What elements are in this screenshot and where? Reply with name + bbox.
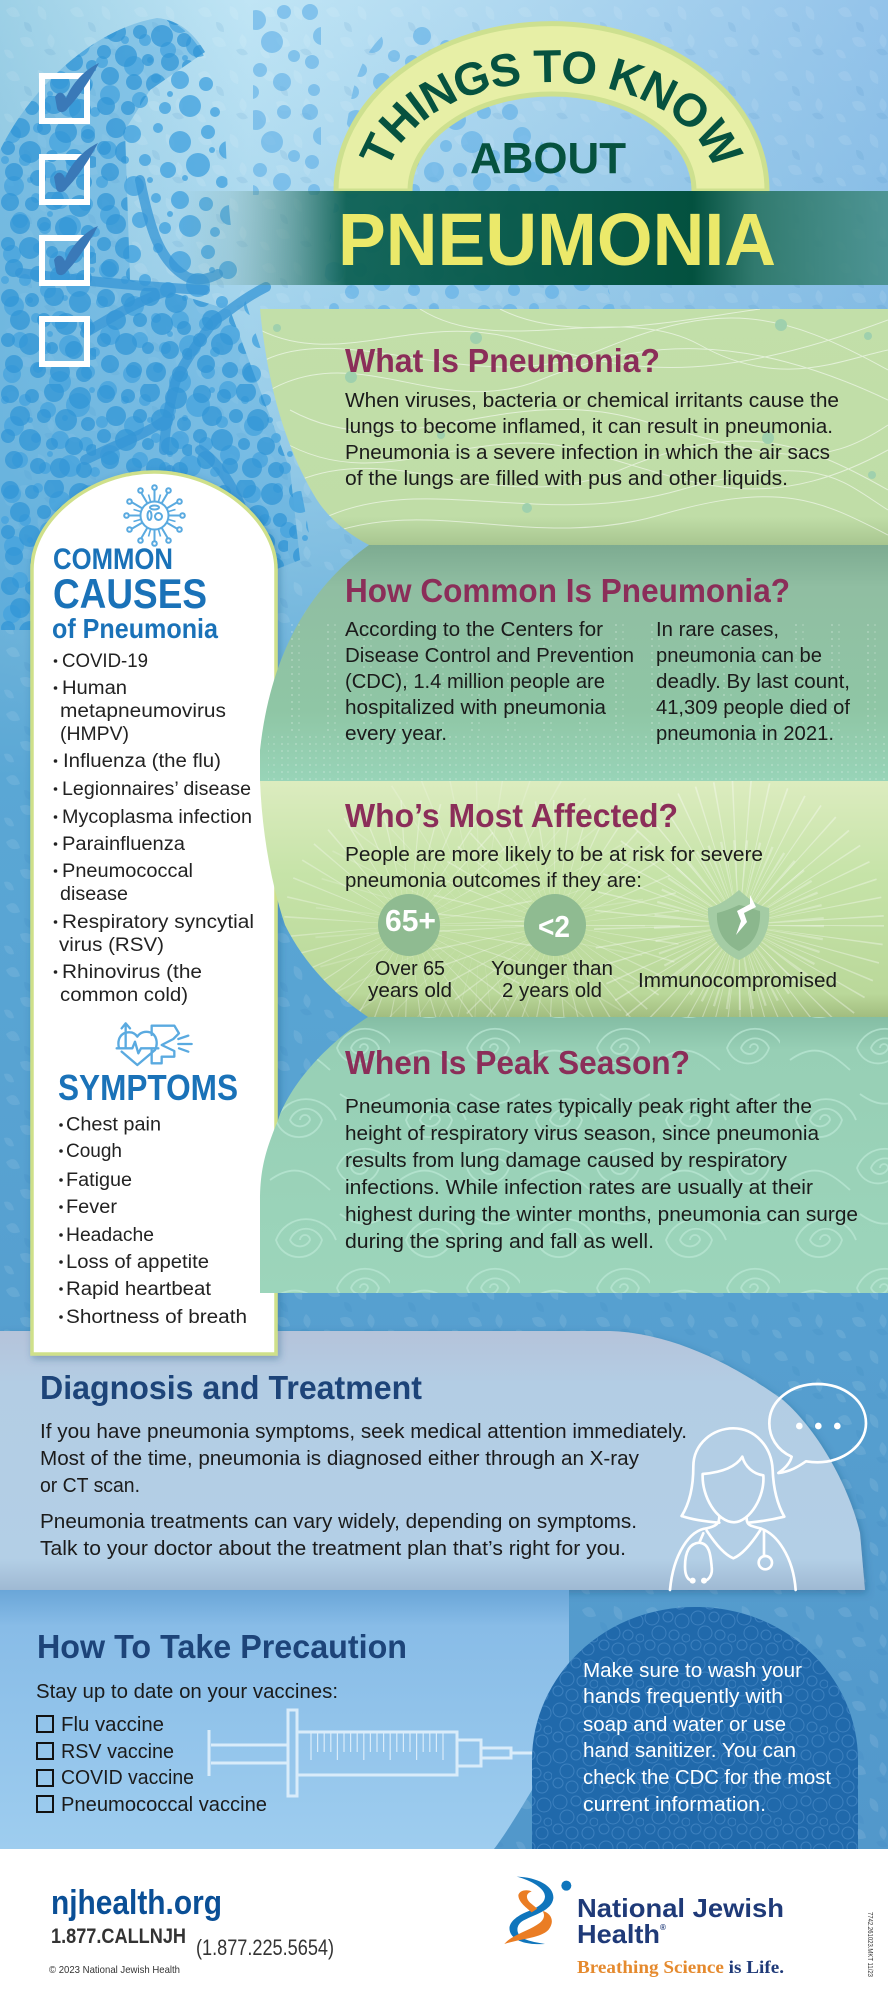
panel: how common is pneumonia [260,545,888,781]
text block: how common, left column: every year. [345,723,447,745]
panel: common causes and symptoms [32,472,276,1354]
text block: who's most affected: People are more likely to be at risk for severe [345,844,763,866]
title curved text: THINGS TO KNOW [358,50,744,163]
text block: when is peak season: infections. While infection rates are usually at their [345,1177,813,1199]
checkbox 3 with tick [42,226,98,283]
list: causes: COVID-19 [62,651,148,672]
list: symptoms: Cough [66,1141,122,1162]
list: symptoms: Chest pain [66,1114,161,1136]
heading: what is pneumonia: What Is Pneumonia? [345,342,660,379]
logo tagline: Breathing Science is Life. [577,1957,784,1977]
title: about: ABOUT [470,134,626,183]
list: symptoms: Shortness of breath [66,1307,247,1328]
checklist: vaccines: COVID vaccine [61,1767,194,1789]
heading: symptoms: SYMPTOMS [58,1067,238,1108]
stat: younger than 2 [491,894,613,1002]
list: causes: virus (RSV) [59,935,164,956]
text block: when is peak season: Pneumonia case rates typically peak right after the [345,1096,812,1118]
icon: doctor with speech bubble [670,1384,866,1590]
checklist: vaccines [37,1714,267,1816]
heading: diagnosis and treatment: Diagnosis and Treatment [40,1369,422,1406]
text block: diagnosis: Most of the time, pneumonia is diagnosed either through an X-ray [40,1448,639,1470]
stat: younger than 2: <2 [538,909,570,944]
footer: phone: 1.877.CALLNJH [51,1925,186,1948]
list: causes: Rhinovirus (the [62,962,202,983]
text block: what is pneumonia [345,390,839,490]
text: vaccine intro: Stay up to date on your vaccines: [36,1681,338,1703]
list: causes: Legionnaires’ disease [62,779,251,800]
decorative light bursts [334,825,824,1025]
logo wordmark: ® [660,1923,666,1932]
icon: virus [124,485,185,546]
text block: how common, right column: In rare cases, [656,619,779,641]
logo wordmark: National Jewish [577,1893,784,1923]
checklist: vaccines: RSV vaccine [61,1741,174,1763]
stat: younger than 2: Younger than [491,958,613,980]
checklist: vaccines: Flu vaccine [61,1714,164,1736]
panel: who's most affected [260,781,888,1025]
footer: phone: (1.877.225.5654) [196,1935,334,1960]
footer [0,1849,888,2015]
list: causes: common cold) [60,985,188,1006]
list: causes: Mycoplasma infection [62,807,252,828]
stat: over 65: 65+ [385,903,436,938]
text block: how common, right column: deadly. By last count, [656,671,850,693]
panel: diagnosis and treatment [0,1331,866,1590]
icon: syringe [209,1710,533,1796]
stat: immunocompromised shield: Immunocompromised [638,970,837,992]
icon: symptoms heart and lungs [117,1023,192,1065]
text block: how common, left column: (CDC), 1.4 million people are [345,671,605,693]
list: symptoms: Rapid heartbeat [66,1279,212,1300]
text block: hand washing: current information. [583,1794,766,1816]
panel: how to take precaution [0,1590,569,1849]
text block: how common, right column: 41,309 people died of [656,697,850,719]
text block: how common, right column: pneumonia can be [656,645,822,667]
text block: when is peak season: highest during the winter months, pneumonia can surge [345,1204,858,1226]
text block: when is peak season [345,1096,858,1253]
heading: how to take precaution: How To Take Precaution [37,1628,407,1665]
list: symptoms: Headache [66,1225,154,1246]
heading: common causes of pneumonia: COMMON [53,543,173,576]
logo: national jewish health [504,1877,784,1977]
list: causes: disease [60,884,128,905]
list: causes: Human [62,678,127,699]
list: causes: Pneumococcal [62,861,193,882]
text block: how common, right column [656,619,850,745]
checkbox 2 with tick [42,143,98,202]
text block: hand washing: soap and water or use [583,1714,786,1736]
title arch [336,24,767,191]
text block: how common, left column: According to the Centers for [345,619,603,641]
list: symptoms: Loss of appetite [66,1252,209,1273]
stat: younger than 2: 2 years old [502,980,602,1002]
list: causes: Parainfluenza [62,834,185,855]
heading: common causes of pneumonia [52,543,218,644]
illustration: trachea dots [253,0,321,195]
stat: over 65: Over 65 [375,958,445,980]
text block: when is peak season: during the spring and fall as well. [345,1231,654,1253]
text block: how common, left column: hospitalized with pneumonia [345,697,607,719]
title: pneumonia: PNEUMONIA [338,198,776,281]
logo mark: helix [504,1877,571,1944]
heading: how common: How Common Is Pneumonia? [345,572,790,609]
text block: what is pneumonia: lungs to become inflamed, it can result in pneumonia. [345,416,833,438]
panel: when is peak season [260,1017,888,1293]
checklist: vaccines: Pneumococcal vaccine [61,1794,267,1816]
list: causes: Respiratory syncytial [62,912,254,933]
checklist [42,63,99,364]
text block: when is peak season: height of respiratory virus season, since pneumonia [345,1123,820,1145]
panel: hand washing arch [532,1607,858,1849]
checkbox 4 empty [42,319,87,364]
heading: who's most affected: Who’s Most Affected? [345,797,678,834]
list: causes: (HMPV) [60,724,129,745]
text block: hand washing: Make sure to wash your [583,1660,802,1682]
stat: over 65: years old [368,980,452,1002]
panel: what is pneumonia [260,309,888,545]
text block: hand washing: check the CDC for the most [583,1767,831,1789]
footer: website: njhealth.org [51,1884,222,1922]
text block: diagnosis: or CT scan. [40,1475,140,1497]
text block: who's most affected [345,844,763,892]
illustration: left lung [0,18,310,630]
list: symptoms [59,1114,247,1328]
text block: hand washing: hand sanitizer. You can [583,1740,796,1762]
list: causes [54,651,254,1006]
text block: how common, right column: pneumonia in 2021. [656,723,834,745]
text block: hand washing: hands frequently with [583,1686,783,1708]
text block: who's most affected: pneumonia outcomes if they are: [345,870,642,892]
logo wordmark: Health [577,1919,660,1949]
illustration: right lung [320,22,615,310]
logo wordmark [577,1893,784,1949]
heading: when is peak season: When Is Peak Season? [345,1044,690,1081]
text block: what is pneumonia: of the lungs are filled with pus and other liquids. [345,468,788,490]
checkbox 1 with tick [42,63,99,121]
footer: copyright: © 2023 National Jewish Health [49,1964,180,1976]
title band [0,191,888,285]
text block: when is peak season: results from lung damage caused by respiratory [345,1150,787,1172]
stat: immunocompromised shield [638,890,837,992]
footer: phone [51,1925,334,1960]
heading: common causes of pneumonia: CAUSES [53,570,207,617]
text block: what is pneumonia: When viruses, bacteria or chemical irritants cause the [345,390,839,412]
heading: common causes of pneumonia: of Pneumonia [52,613,218,644]
text block: hand washing [583,1660,831,1816]
text block: what is pneumonia: Pneumonia is a severe infection in which the air sacs [345,442,830,464]
list: causes: Influenza (the flu) [63,751,221,772]
text block: diagnosis: If you have pneumonia symptoms, seek medical attention immediately. [40,1421,687,1443]
text block: how common, left column [345,619,634,745]
footer: print code: 7742.261023.MKT 11/23 [866,1912,873,1977]
list: symptoms: Fever [66,1197,118,1218]
text block: how common, left column: Disease Control and Prevention [345,645,634,667]
text block: diagnosis: Talk to your doctor about the treatment plan that’s right for you. [40,1538,626,1560]
list: causes: metapneumovirus [60,701,226,722]
text block: diagnosis: Pneumonia treatments can vary widely, depending on symptoms. [40,1511,637,1533]
list: symptoms: Fatigue [66,1170,132,1191]
stat: over 65 [368,894,452,1002]
text block: diagnosis [40,1421,687,1560]
